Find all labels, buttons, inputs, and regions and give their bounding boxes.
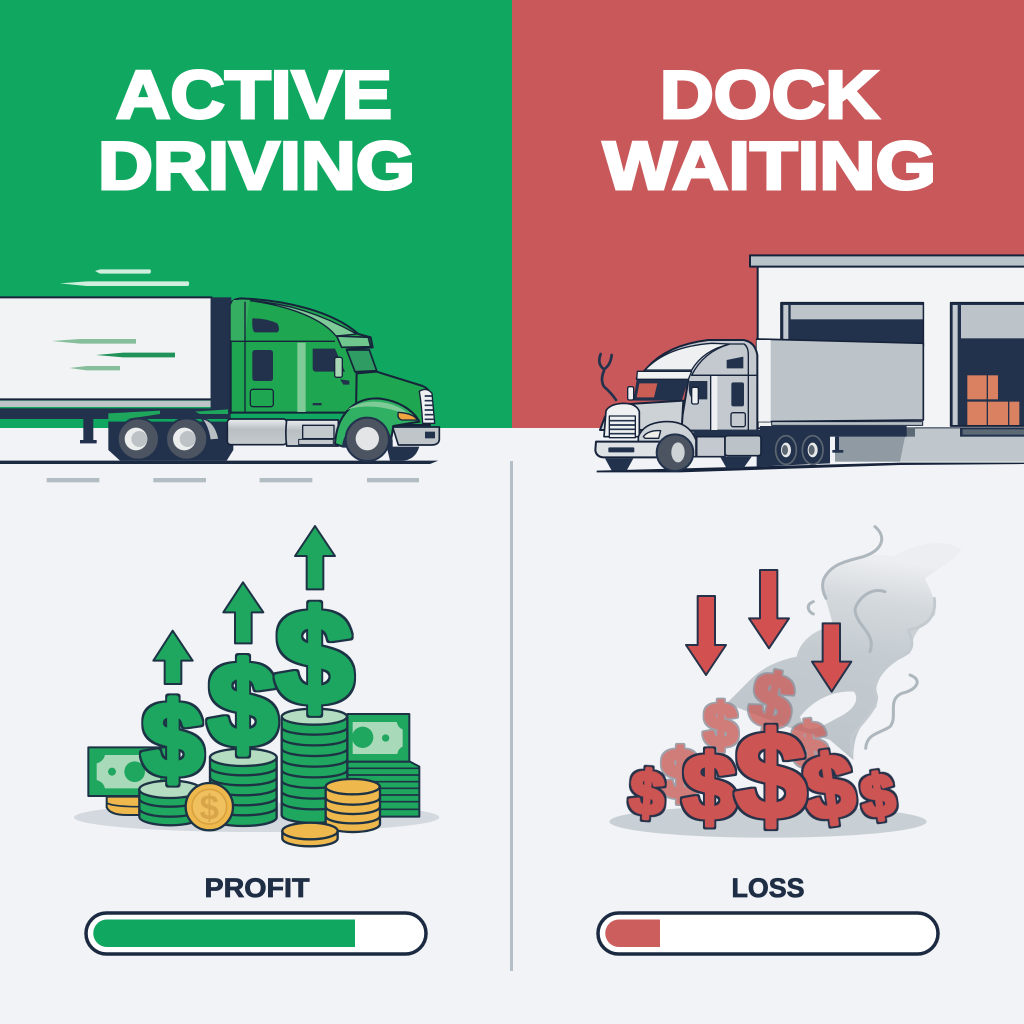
smoke wisps bbox=[808, 527, 935, 753]
front dollar signs: $ bbox=[857, 762, 899, 830]
heading: active driving bbox=[98, 57, 415, 204]
green truck illustration bbox=[0, 269, 439, 482]
front fender bbox=[335, 398, 419, 447]
trailer bbox=[0, 297, 231, 443]
heading: active driving: DRIVING bbox=[98, 128, 415, 204]
dollar signs bbox=[142, 582, 353, 798]
front bumper bbox=[595, 442, 663, 457]
speed lines above trailer bbox=[60, 269, 189, 286]
front bumper bbox=[393, 427, 439, 445]
up arrows bbox=[153, 526, 335, 684]
dollar signs: $ bbox=[142, 681, 203, 798]
grey fender and fuel tank bbox=[638, 422, 761, 457]
faded dollar signs bbox=[661, 657, 831, 812]
loss label: LOSS bbox=[732, 873, 804, 903]
grey front wheel bbox=[657, 434, 693, 471]
heading: dock waiting bbox=[603, 57, 936, 204]
coin stack left bbox=[139, 781, 201, 825]
chassis band bbox=[693, 430, 760, 437]
front dollar signs: $ bbox=[628, 758, 666, 828]
gold coin medal: $ bbox=[200, 788, 219, 827]
fuel tank and step bbox=[227, 419, 338, 446]
panel: active driving header bbox=[0, 0, 512, 428]
faded dollar signs: $ bbox=[789, 710, 831, 782]
heading: dock waiting: DOCK bbox=[660, 57, 879, 133]
exhaust wisp bbox=[599, 354, 616, 400]
down arrows bbox=[686, 570, 851, 692]
profit money illustration bbox=[74, 526, 439, 846]
faded dollar signs: $ bbox=[743, 657, 800, 745]
loss money illustration bbox=[609, 527, 962, 844]
loading dock bbox=[597, 427, 1024, 472]
dollar signs: $ bbox=[208, 638, 277, 770]
dock door left bbox=[781, 303, 923, 346]
ground shadow bbox=[609, 806, 927, 838]
profit progress bar bbox=[86, 913, 426, 954]
warehouse and grey truck illustration bbox=[595, 255, 1024, 472]
front dollar signs: $ bbox=[797, 734, 861, 840]
trailer wheels bbox=[776, 436, 823, 464]
undercarriage bbox=[108, 422, 233, 461]
cab bbox=[231, 298, 435, 425]
grey cab bbox=[600, 340, 757, 438]
dock door right with boxes bbox=[951, 303, 1024, 426]
heading: active driving: ACTIVE bbox=[116, 57, 392, 133]
panel: dock waiting header bbox=[512, 0, 1024, 428]
smoke cloud bbox=[727, 543, 962, 760]
front dollar signs: $ bbox=[735, 707, 807, 844]
loss progress bar bbox=[598, 913, 938, 954]
wheels bbox=[118, 418, 389, 461]
single gold coin bbox=[282, 823, 338, 846]
front dollar signs bbox=[628, 707, 899, 844]
road dashes bbox=[47, 478, 419, 482]
warehouse building bbox=[750, 255, 1024, 428]
faded dollar signs: $ bbox=[661, 736, 699, 812]
wheel arch bbox=[342, 422, 393, 447]
profit label: PROFIT bbox=[204, 873, 310, 903]
dollar signs: $ bbox=[275, 582, 353, 732]
heading: dock waiting: WAITING bbox=[603, 128, 936, 204]
ground shadow bbox=[74, 803, 439, 832]
grey trailer bbox=[757, 339, 923, 467]
coin stack right tall bbox=[282, 709, 347, 823]
gold coin medal bbox=[186, 783, 233, 830]
gold coin stack bbox=[326, 779, 380, 832]
bill left bbox=[88, 747, 167, 796]
front dollar signs: $ bbox=[683, 735, 736, 838]
gold coins behind bbox=[107, 797, 140, 815]
bill stack right bbox=[347, 714, 419, 817]
coin stack middle bbox=[210, 749, 277, 826]
center divider bbox=[510, 461, 513, 971]
faded dollar signs: $ bbox=[704, 692, 737, 759]
road line bbox=[0, 461, 438, 464]
